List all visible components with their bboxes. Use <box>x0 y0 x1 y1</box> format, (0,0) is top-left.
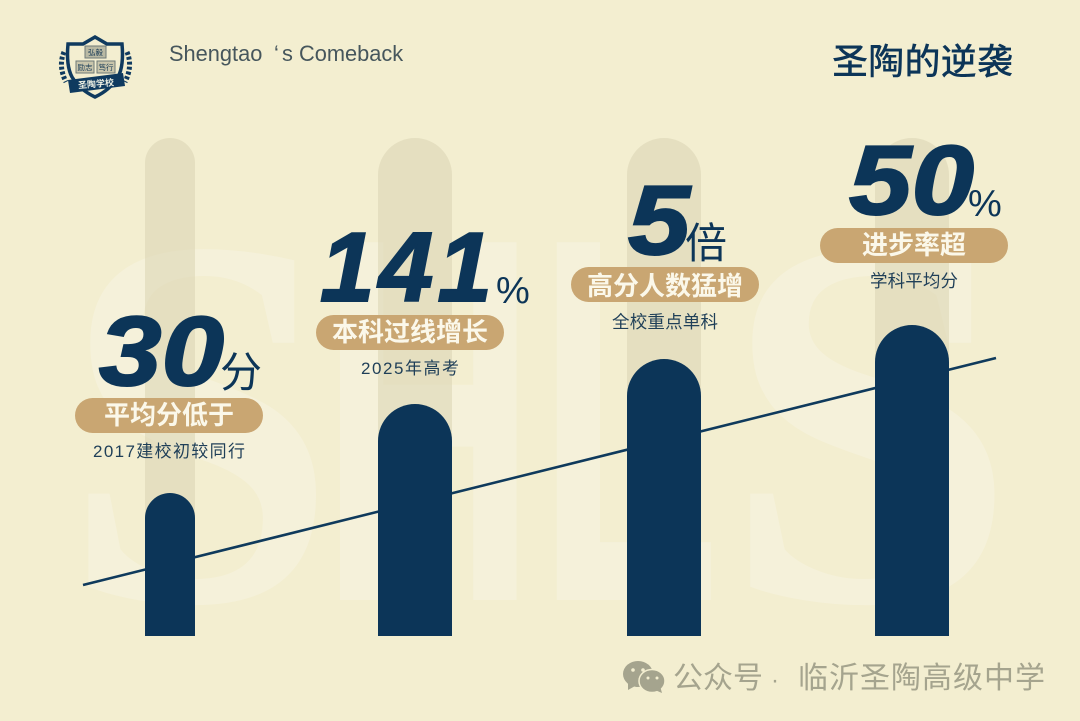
subtitle: English heading: Shengtao <box>169 41 262 66</box>
stat: 5 times: 全校重点单科 <box>612 312 718 332</box>
text: HL <box>320 130 720 711</box>
bar tracks <box>145 138 949 538</box>
subtitle: English heading: s Comeback <box>282 41 403 66</box>
stat: 50 percent: 进步率超 <box>862 225 966 262</box>
stat: 141 percent: 141 <box>320 212 492 322</box>
stat: 50 percent: 50 <box>849 125 974 235</box>
stat: 141 percent <box>316 212 530 378</box>
stat: 141 percent: 2025年高考 <box>361 359 459 378</box>
stat: 50 percent <box>820 125 1008 291</box>
stat: 50 percent: 学科平均分 <box>870 271 958 291</box>
stat: 50 percent: % <box>968 183 1002 225</box>
logo: school shield: 励志 <box>78 62 93 72</box>
title: 圣陶的逆袭 <box>832 33 1013 85</box>
bar chart <box>145 325 949 636</box>
stat: 30 points: 2017建校初较同行 <box>93 442 245 461</box>
stat: 5 times: 高分人数猛增 <box>587 266 743 303</box>
logo: school shield: 弘毅 <box>88 47 103 57</box>
stat: 5 times: 倍 <box>685 210 727 271</box>
logo: school shield: 圣陶学校 <box>78 76 114 91</box>
stat: 5 times <box>571 165 759 332</box>
watermark: account name: · <box>771 667 779 694</box>
trend line <box>83 358 996 585</box>
watermark: account name: 公众号 <box>673 662 763 695</box>
watermark: account name <box>673 662 1045 695</box>
stat: 5 times: 5 <box>628 165 692 275</box>
logo: school shield <box>61 37 130 97</box>
text: S <box>62 128 337 715</box>
watermark: account name: 临沂圣陶高级中学 <box>798 662 1045 695</box>
stat: 30 points: 分 <box>220 339 262 400</box>
logo: school shield: 笃行 <box>98 62 114 72</box>
icon: wechat <box>623 661 665 693</box>
stat: 141 percent: 本科过线增长 <box>332 312 488 349</box>
stat: 30 points: 30 <box>99 296 224 406</box>
stat: 141 percent: % <box>496 270 530 312</box>
subtitle: English heading <box>169 41 403 66</box>
text: S <box>722 128 1017 715</box>
stat: 30 points <box>75 296 263 461</box>
stat: 30 points: 平均分低于 <box>104 395 234 432</box>
subtitle: English heading: ‘ <box>274 41 279 66</box>
